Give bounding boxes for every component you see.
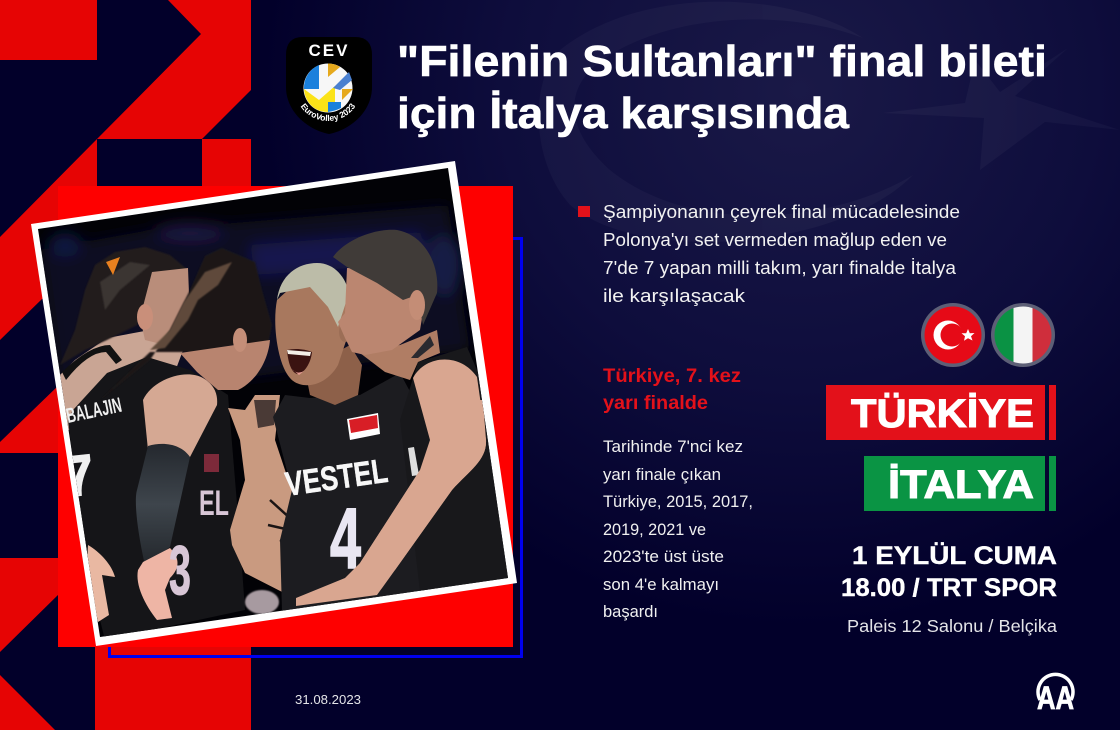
right side jersey letter (408, 447, 419, 476)
date: 31.08.2023 (295, 692, 361, 707)
side text block: son 4'e kalmayı (603, 576, 719, 594)
icon: AA logo: AA (1037, 680, 1074, 716)
photo frame (30, 160, 520, 650)
match date and channel: 18.00 / TRT SPOR (841, 574, 1057, 602)
summary text block: ile karşılaşacak (603, 285, 746, 306)
second player face and neck (180, 340, 270, 390)
center player neck (305, 345, 362, 405)
side text block: Tarihinde 7'nci kez (603, 438, 743, 456)
strap of back player (62, 345, 122, 380)
blue outline frame (110, 238, 522, 656)
title: için İtalya karşısında (397, 89, 850, 138)
photo: Turkish players huddle (30, 160, 520, 650)
tattooed arm center player (228, 395, 295, 596)
red panel (58, 186, 513, 647)
sub heading: Türkiye, 7. kez (603, 365, 741, 387)
photo: Turkish players huddle: 3 (169, 531, 191, 609)
Türkiye bar: TÜRKİYE (851, 391, 1034, 436)
arena blur background (40, 205, 470, 400)
right player hair (333, 230, 437, 325)
side text block: 2019, 2021 ve (603, 521, 706, 539)
side text block: Türkiye, 2015, 2017, (603, 493, 753, 511)
sub heading (603, 365, 741, 414)
İtalya bar (864, 456, 1056, 511)
second player hair (116, 248, 272, 386)
CEV EuroVolley logo: EuroVolley 2023 (300, 103, 355, 122)
sub heading: yarı finalde (603, 392, 708, 414)
jersey number: 7 (61, 442, 97, 510)
center player hair (277, 263, 349, 327)
VESTEL sponsor: VESTEL (283, 452, 390, 504)
center player face (275, 287, 346, 386)
bullet marker (578, 206, 590, 217)
second player arm (143, 374, 217, 457)
İtalya bar: İTALYA (888, 463, 1034, 507)
summary text block: Şampiyonanın çeyrek final mücadelesinde (603, 201, 960, 222)
left red geometric strips (0, 0, 251, 730)
summary text block: 7'de 7 yapan milli takım, yarı finalde İtalya (603, 257, 957, 278)
summary text block (603, 201, 960, 306)
jersey name: BALAJIN (64, 394, 124, 428)
hand on hip (137, 548, 178, 620)
right player neck and shoulder (360, 330, 440, 380)
left player jersey (68, 357, 245, 640)
flag badge (347, 413, 380, 440)
icon: Italian flag (991, 303, 1055, 367)
side text block: yarı finale çıkan (603, 466, 721, 484)
venue: Paleis 12 Salonu / Belçika (847, 616, 1057, 636)
middle jersey EL: EL (199, 484, 229, 523)
foreground right arm (296, 400, 486, 606)
watermark: Turkish flag crescent and star (539, 2, 1120, 242)
match date and channel: 1 EYLÜL CUMA (852, 541, 1057, 570)
side text block: başardı (603, 603, 658, 621)
back player shoulder (60, 330, 185, 430)
background gap glow (245, 590, 279, 614)
right player face (338, 268, 425, 355)
number 4: 4 (330, 491, 361, 587)
open mouth (287, 349, 312, 374)
CEV EuroVolley logo (286, 37, 372, 134)
title: "Filenin Sultanları" final bileti (397, 37, 1047, 86)
CEV EuroVolley logo: CEV (309, 41, 349, 60)
center player jersey (273, 373, 430, 612)
summary text block: Polonya'yı set vermeden mağlup eden ve (603, 229, 947, 250)
back player hair (60, 247, 188, 365)
side text block: 2023'te üst üste (603, 548, 724, 566)
middle jersey badge (204, 454, 219, 472)
right player back jersey (410, 347, 508, 591)
match date and channel (841, 541, 1057, 602)
side text block (603, 438, 753, 621)
title (397, 37, 1047, 138)
icon: Turkish flag (921, 303, 985, 367)
Türkiye bar (826, 385, 1056, 440)
arm sleeve (136, 444, 190, 565)
